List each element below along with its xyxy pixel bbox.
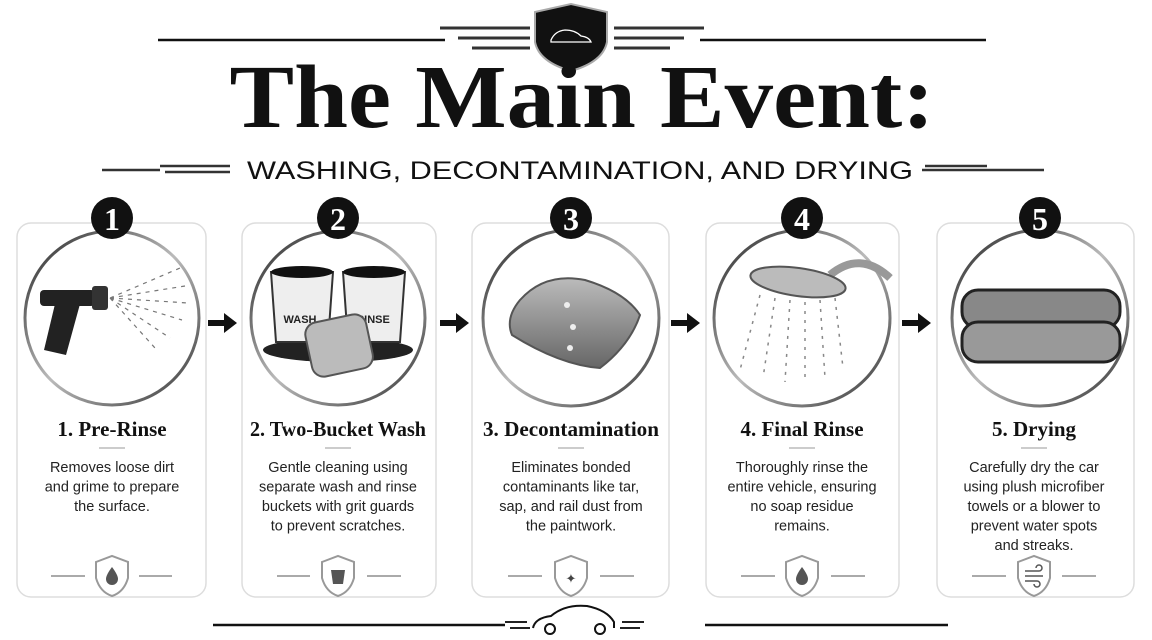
icon: drop shield	[51, 556, 172, 596]
panel: 1 Pre-Rinse	[17, 197, 206, 597]
panel: 1 Pre-Rinse: 1. Pre-Rinse	[57, 417, 167, 441]
header emblem	[158, 4, 986, 71]
panel: 5 Drying: using plush microfiber	[963, 480, 1105, 496]
panel: 3 Decontamination: sap, and rail dust from	[499, 499, 643, 515]
panel: 3 Decontamination: the paintwork.	[526, 518, 616, 534]
footer car divider	[213, 606, 948, 634]
panel: 3 Decontamination: 3. Decontamination	[483, 417, 659, 441]
subtitle	[102, 157, 1044, 185]
panel: 2 Two-Bucket Wash: 2. Two-Bucket Wash	[250, 417, 426, 441]
panel: 2 Two-Bucket Wash: buckets with grit guards	[262, 499, 414, 515]
panel: 2 Two-Bucket Wash: Gentle cleaning using	[268, 460, 408, 476]
panel: 3 Decontamination: Eliminates bonded	[511, 460, 631, 476]
subtitle: WASHING, DECONTAMINATION, AND DRYING	[247, 157, 913, 185]
icon: wind shield	[972, 556, 1096, 596]
panel: 1 Pre-Rinse: and grime to prepare	[45, 480, 179, 496]
panel: 2 Two-Bucket Wash: separate wash and rinse	[259, 480, 417, 496]
panel: 2 Two-Bucket Wash	[242, 197, 436, 597]
panel: 4 Final Rinse: entire vehicle, ensuring	[727, 480, 877, 496]
panel: 5 Drying: Carefully dry the car	[969, 460, 1099, 476]
panel: 1 Pre-Rinse: Removes loose dirt	[50, 460, 174, 476]
icon: buckets: WASH	[284, 314, 317, 326]
panel: 4 Final Rinse: Thoroughly rinse the	[736, 460, 868, 476]
icon: drop shield	[741, 556, 865, 596]
panel: 4 Final Rinse	[706, 197, 899, 597]
panel: 5 Drying: 5	[1032, 201, 1048, 237]
panel: 5 Drying: towels or a blower to	[968, 499, 1100, 515]
panel: 5 Drying: 5. Drying	[992, 417, 1076, 441]
panel: 3 Decontamination: contaminants like tar,	[503, 480, 639, 496]
icon: sparkle shield: ✦	[566, 572, 577, 587]
panel: 4 Final Rinse: 4. Final Rinse	[740, 417, 864, 441]
arrows	[208, 313, 931, 333]
icon: sparkle shield	[508, 556, 634, 596]
panel: 1 Pre-Rinse: 1	[104, 201, 120, 237]
icon: shower head	[740, 261, 890, 382]
panel: 5 Drying: and streaks.	[994, 538, 1074, 554]
panel: 4 Final Rinse: remains.	[774, 518, 830, 534]
panel: 3 Decontamination	[472, 197, 669, 597]
title: The Main Event:	[230, 48, 934, 147]
icon: buckets	[263, 266, 413, 379]
panel: 2 Two-Bucket Wash: to prevent scratches.	[271, 518, 405, 534]
panel: 4 Final Rinse: 4	[794, 201, 810, 237]
icon: towel	[962, 290, 1120, 362]
icon: bucket shield	[277, 556, 401, 596]
icon: hose nozzle	[40, 268, 188, 355]
panel: 5 Drying	[937, 197, 1134, 597]
panel: 4 Final Rinse: no soap residue	[750, 499, 854, 515]
panel: 2 Two-Bucket Wash: 2	[330, 201, 346, 237]
icon: buckets: RINSE	[356, 314, 390, 326]
panel: 1 Pre-Rinse: the surface.	[74, 499, 150, 515]
icon: clay bar	[510, 278, 640, 368]
panel: 5 Drying: prevent water spots	[971, 518, 1097, 534]
panel: 3 Decontamination: 3	[563, 201, 579, 237]
